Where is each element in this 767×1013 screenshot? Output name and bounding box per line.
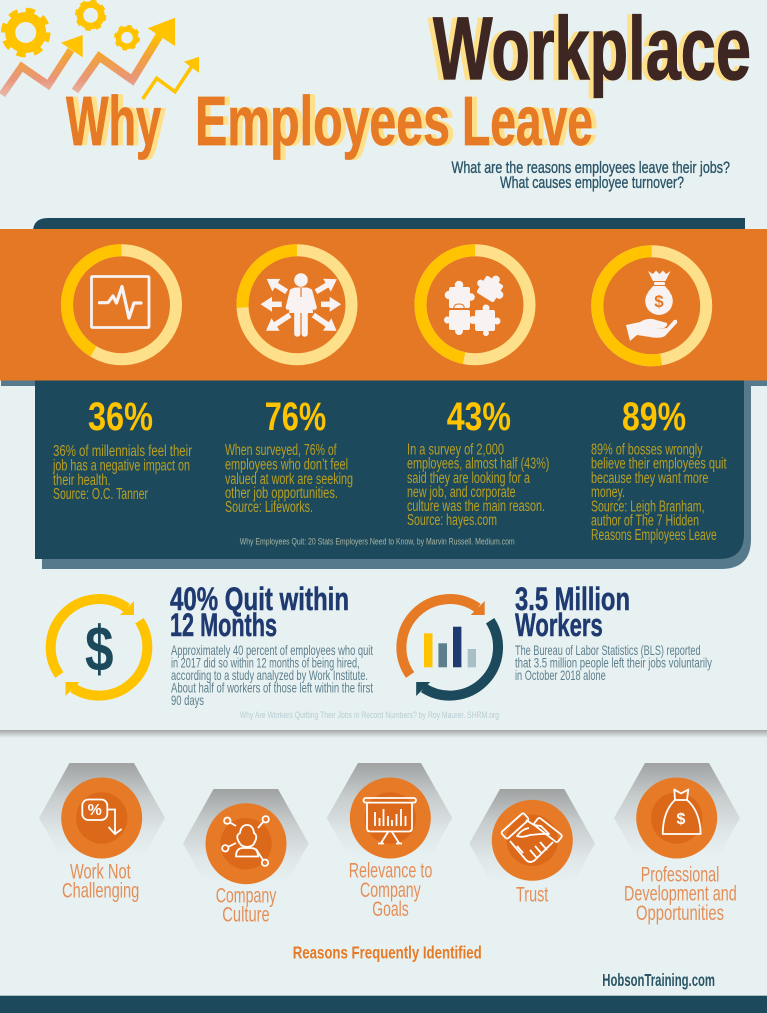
heading: Why Employees Leave: Employees (200, 82, 455, 160)
reason: work not challenging (39, 763, 165, 903)
citation: SHRM article: Why Are Workers Quitting Their Jobs in Record Numbers? by Roy Maurer. SHRM.org (240, 710, 499, 720)
stat: 89 percent: 89% of bosses wrongly (591, 442, 703, 458)
heading: 3.5 Million Workers: Workers (515, 607, 603, 643)
text: 40 percent description: 90 days (171, 692, 204, 708)
subtitle questions (452, 158, 730, 192)
text: 40 percent description (171, 642, 373, 708)
heading: 3.5 Million Workers: 3.5 Million (515, 581, 630, 617)
stat: 43 percent: new job, and corporate (407, 484, 516, 501)
heading: Why Employees Leave: Leave (462, 82, 593, 160)
icon: dollar with cycle arrows (51, 599, 147, 696)
heading: Why Employees Leave: Leave (467, 82, 598, 160)
footer bar (0, 996, 767, 1013)
icon: person with network nodes (222, 816, 269, 866)
stat: 76 percent: employees who don’t feel (225, 456, 348, 474)
icon: money bag: $ (677, 811, 686, 828)
icon: presentation board (364, 798, 416, 844)
panel: orange band with rings (0, 229, 767, 380)
arrow: rising left (2, 35, 83, 95)
reason: trust (469, 789, 595, 907)
stat: 43 percent: Source: hayes.com (407, 512, 497, 529)
reason: company culture: Company (216, 884, 276, 908)
ring: 89 percent money bag and hand (597, 251, 706, 360)
stat: 43 percent: culture was the main reason. (407, 498, 545, 515)
reason: trust: Trust (516, 883, 548, 907)
stat: 36 percent: 36% of millennials feel their (53, 443, 192, 460)
text: 40 percent description: in 2017 did so within 12 months of being hired, (171, 654, 360, 670)
reason: professional development (614, 763, 740, 925)
caption: reasons frequently identified: Reasons Frequently Identified (293, 942, 482, 962)
citation: Medium article: Why Employees Quit: 20 Stats Employers Need to Know, by Marvin Russell. Medium.com (240, 536, 515, 546)
text: 40 percent description: Approximately 40 percent of employees who quit (171, 642, 373, 658)
arrow: rising middle (75, 18, 175, 91)
stat: 89 percent: money. (591, 484, 625, 501)
stat: 43 percent: 43% (447, 395, 511, 439)
icon: percent with down arrow: % (88, 802, 102, 819)
stat: 36 percent: Source: O.C. Tanner (53, 486, 148, 503)
text: 3.5 million description: in October 2018 alone (515, 667, 606, 683)
icon: large gear (3, 10, 48, 55)
reason: company culture (183, 789, 309, 927)
stat: 89 percent: 89% (622, 395, 686, 439)
stat: 43 percent (407, 395, 549, 529)
stat: 76 percent (225, 395, 353, 516)
text: 3.5 million description (515, 642, 712, 683)
heading: 3.5 Million Workers (515, 581, 630, 643)
heading: Why Employees Leave: Employees (195, 82, 450, 160)
stat: 36 percent: job has a negative impact on (52, 457, 190, 474)
reason: work not challenging: Work Not (70, 859, 131, 883)
stat: 76 percent: other job opportunities. (225, 485, 338, 502)
stat: 89 percent: because they want more (591, 470, 708, 487)
stat: 36 percent: 36% (88, 395, 153, 439)
icon: bar chart with cycle arrows (401, 599, 498, 696)
stat: 76 percent: Source: Lifeworks. (225, 499, 313, 516)
text: 40 percent description: according to a study analyzed by Work Institute. (171, 667, 368, 683)
ring: 43 percent puzzle pieces (420, 250, 530, 359)
text: 40 percent description: About half of workers of those left within the first (171, 680, 373, 696)
stat: 89 percent (591, 395, 727, 544)
stat: 89 percent: Source: Leigh Branham, (591, 498, 704, 515)
reason: professional development: Professional (641, 863, 719, 887)
ring: 36 percent monitor (67, 250, 176, 359)
ring: 89 percent money bag and hand: $ (654, 292, 664, 311)
stat: 43 percent: In a survey of 2,000 (407, 442, 504, 458)
stat: 43 percent: said they are looking for a (407, 470, 530, 487)
stat: 89 percent: author of The 7 Hidden (591, 513, 699, 530)
reason: work not challenging: Challenging (62, 879, 139, 903)
stat: 36 percent (52, 395, 192, 503)
icon: dollar with cycle arrows: $ (85, 612, 114, 684)
heading: Why Employees Leave: Why (66, 82, 161, 160)
reason: relevance to company goals: Relevance to (349, 859, 432, 883)
stat: 76 percent: valued at work are seeking (225, 471, 353, 488)
reason: relevance to company goals (327, 763, 452, 921)
reason: relevance to company goals: Goals (372, 897, 409, 921)
heading: 40% Quit within 12 Months (170, 581, 349, 643)
ring: 76 percent person with arrows (242, 250, 352, 359)
icon: money bag (663, 790, 701, 834)
reason: relevance to company goals: Company (360, 878, 421, 902)
reason: company culture: Culture (222, 903, 270, 927)
icon: top gear (77, 1, 105, 29)
heading: Why Employees Leave (66, 82, 598, 160)
subtitle questions: What causes employee turnover? (500, 173, 684, 192)
panel: statistics background (1, 218, 767, 569)
heading: 40% Quit within 12 Months: 12 Months (170, 607, 277, 643)
icon: handshake (501, 813, 563, 862)
stat: 76 percent: 76% (265, 395, 326, 439)
reason: professional development: Opportunities (636, 901, 724, 925)
icon: small gear (115, 26, 139, 49)
heading: Why Employees Leave: Why (71, 82, 166, 160)
stat: 36 percent: their health. (53, 472, 111, 489)
illustration: gears and rising arrows (2, 1, 199, 99)
stat: 43 percent: employees, almost half (43%) (407, 456, 549, 473)
stat: 76 percent: When surveyed, 76% of (225, 442, 337, 459)
arrow: rising right (143, 57, 199, 99)
heading: 40% Quit within 12 Months: 40% Quit within (170, 581, 349, 617)
